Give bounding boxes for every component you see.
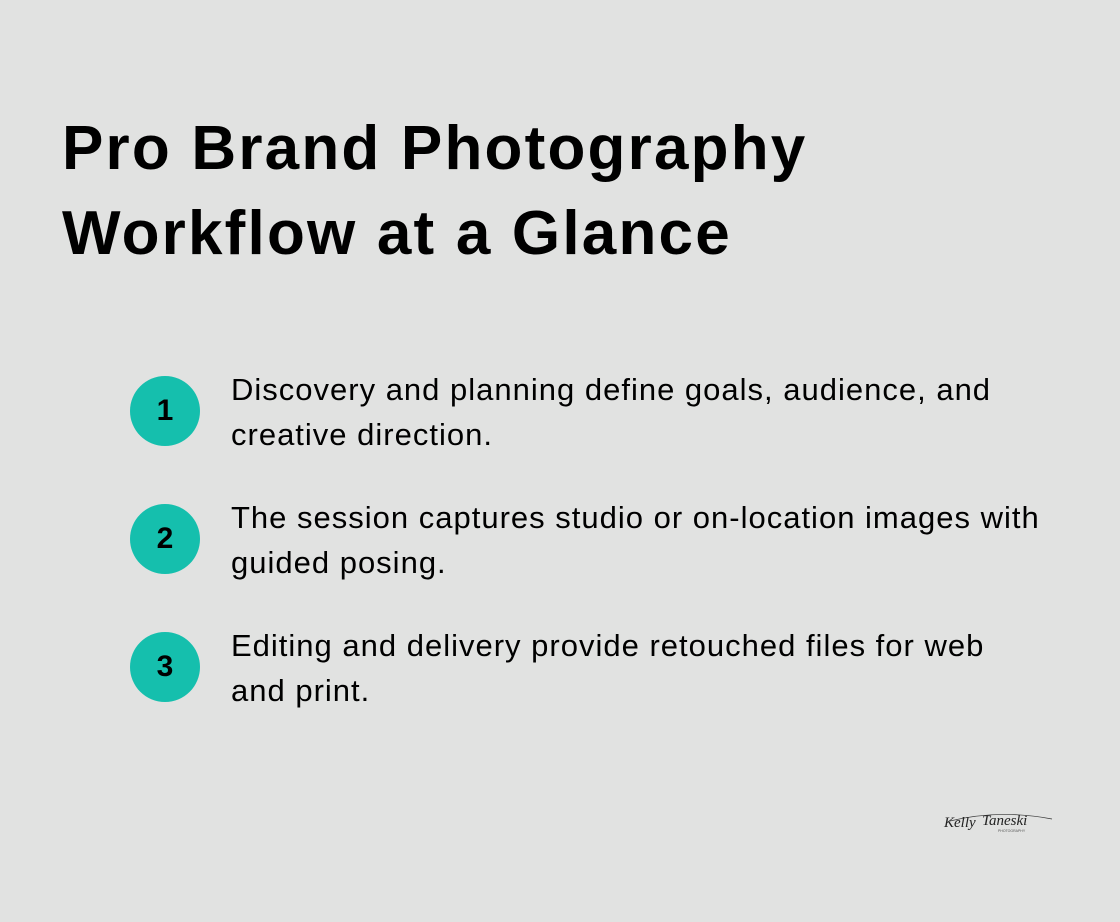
step 1 text: Discovery and planning define goals, audience, and bbox=[231, 372, 991, 407]
step 3 text bbox=[231, 628, 984, 708]
step 2 bbox=[130, 500, 1040, 580]
step 1 text bbox=[231, 372, 991, 452]
number badge 2 bbox=[130, 504, 200, 574]
logo signature: Taneski bbox=[982, 813, 1027, 829]
step 2 text: The session captures studio or on-location images with bbox=[231, 500, 1040, 535]
number badge 1 bbox=[130, 376, 200, 446]
number badge 3 bbox=[130, 632, 200, 702]
step 2 text: guided posing. bbox=[231, 545, 447, 580]
logo signature bbox=[943, 813, 1052, 833]
step 1 text: creative direction. bbox=[231, 417, 493, 452]
step 3 text: Editing and delivery provide retouched files for web bbox=[231, 628, 984, 663]
logo signature: PHOTOGRAPHY bbox=[998, 829, 1026, 833]
logo signature: Kelly bbox=[943, 815, 976, 831]
step 3 text: and print. bbox=[231, 673, 370, 708]
step 2 text bbox=[231, 500, 1040, 580]
step 3 bbox=[130, 628, 984, 708]
title: Workflow at a Glance bbox=[62, 199, 732, 268]
step 1 bbox=[130, 372, 991, 452]
title bbox=[62, 114, 807, 268]
number badge 2: 2 bbox=[157, 522, 173, 555]
number badge 1: 1 bbox=[157, 394, 173, 427]
title: Pro Brand Photography bbox=[62, 114, 807, 183]
number badge 3: 3 bbox=[157, 650, 173, 683]
